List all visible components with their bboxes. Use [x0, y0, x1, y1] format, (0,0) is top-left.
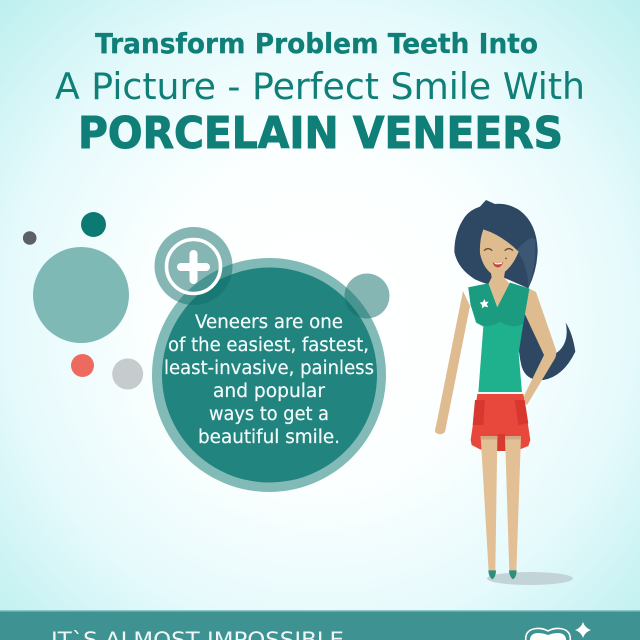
illustration: smiling woman: [435, 200, 575, 585]
shoes: [488, 570, 517, 579]
legs: [481, 436, 521, 572]
icon: sparkle: [575, 622, 591, 638]
banner top edge: [0, 610, 640, 612]
circle: large teal: [33, 247, 129, 343]
ground shadow: [487, 572, 573, 585]
bubble text: of the easiest, fastest,: [168, 335, 369, 356]
skirt pockets: [473, 400, 528, 425]
title line 1: Transform Problem Teeth Into: [95, 28, 538, 60]
bubble text: least-invasive, painless: [164, 358, 374, 379]
skirt centre panel: [497, 434, 505, 451]
hair highlight: [517, 238, 535, 287]
waistband: [477, 392, 523, 395]
bubble text: Veneers are one: [195, 312, 343, 333]
bubble text: beautiful smile.: [198, 427, 340, 448]
hair main: [454, 200, 538, 288]
smile face details: [484, 249, 513, 267]
icon: star on top: [480, 299, 489, 308]
circle: red: [71, 354, 94, 377]
icon: plus badge: [154, 227, 232, 305]
red skirt: [471, 394, 530, 451]
bubble inner disc: [162, 268, 377, 482]
title: [55, 28, 585, 159]
bubble text: ways to get a: [209, 404, 329, 425]
icon: tooth: [526, 628, 570, 640]
title line 2: A Picture - Perfect Smile With: [55, 65, 585, 108]
right arm: [522, 288, 556, 405]
small overlapping circle: [344, 274, 390, 318]
circle: light grey: [112, 358, 143, 390]
panel: veneers callout bubble: [152, 227, 390, 492]
neck and face: [480, 229, 519, 307]
left arm: [435, 291, 470, 434]
hair tail: [518, 307, 575, 380]
banner background: [0, 611, 640, 640]
circle: dark teal: [81, 212, 106, 237]
bubble text: and popular: [213, 381, 325, 402]
title line 3: PORCELAIN VENEERS: [78, 108, 563, 159]
green top: [468, 283, 529, 393]
panel: bottom banner: [0, 610, 640, 640]
circle: dark grey: [23, 231, 36, 245]
bubble outer ring: [152, 258, 386, 492]
top bust shading: [468, 283, 529, 326]
bubble text: [164, 312, 374, 448]
decorative circles: [23, 212, 143, 390]
